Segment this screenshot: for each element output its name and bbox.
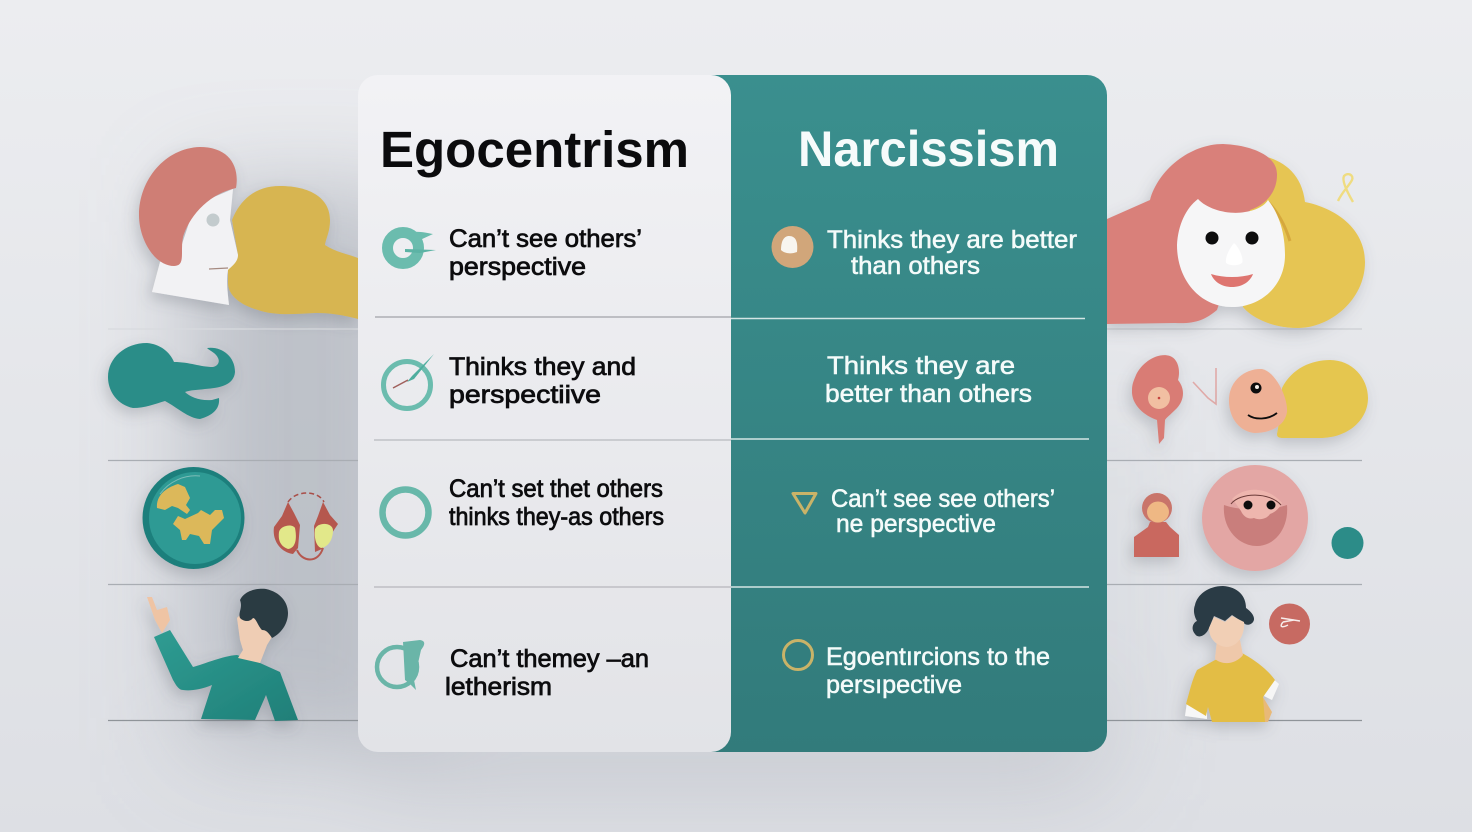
text: narc row 2 bbox=[825, 352, 1032, 408]
icon: pink circle with eyes bbox=[1202, 465, 1308, 571]
icon: teal squiggle bbox=[108, 343, 235, 419]
illustration: left person pointing bbox=[147, 589, 298, 721]
icon: teal dot bbox=[1332, 527, 1364, 559]
hair bbox=[1193, 586, 1254, 636]
icon: red hair bbox=[139, 147, 237, 266]
hair bbox=[240, 589, 288, 638]
text: ego row 1: perspective bbox=[449, 253, 586, 281]
icon: yellow headband bbox=[1268, 202, 1290, 241]
neck and face bbox=[237, 610, 275, 663]
face bbox=[1209, 616, 1244, 647]
icon: narc row 3 bbox=[793, 494, 816, 513]
heading: egocentrism: Egocentrism bbox=[380, 121, 689, 178]
text: narc row 4: Egoentırcions to the bbox=[826, 643, 1050, 671]
text: narc row 1: than others bbox=[851, 252, 980, 280]
panel: egocentrism bbox=[358, 75, 731, 752]
shirt bbox=[1186, 653, 1275, 722]
illustration: right woman face bbox=[1107, 144, 1365, 328]
icon: narc row 4 bbox=[784, 640, 812, 670]
icon: mouth bbox=[209, 268, 228, 269]
text: ego row 2 bbox=[449, 353, 636, 409]
icon: nose bbox=[1226, 243, 1243, 265]
card shadow bbox=[190, 190, 1125, 780]
text: narc row 2: better than others bbox=[825, 380, 1032, 408]
text: ego row 2: perspectiive bbox=[449, 381, 601, 409]
icon: pink check mark bbox=[1193, 368, 1216, 404]
text: narc row 4 bbox=[826, 643, 1050, 699]
icon: ego row 4 bbox=[377, 640, 424, 690]
text: narc row 3: Can’t see see others’ bbox=[831, 485, 1055, 513]
illustration: left head in profile with speech shape bbox=[139, 147, 358, 319]
text: ego row 3 bbox=[449, 475, 664, 531]
heading: narcissism: Narcissism bbox=[798, 121, 1059, 177]
icon: eyes bbox=[1206, 232, 1218, 244]
text: ego row 1 bbox=[449, 225, 642, 281]
icon: yellow ribbon bbox=[1338, 174, 1353, 202]
icon: red glasses figure bbox=[274, 493, 338, 560]
panel: narcissism bbox=[690, 75, 1107, 752]
hand bbox=[147, 597, 170, 633]
text: ego row 3: thinks they-as others bbox=[449, 503, 664, 531]
icon: ego row 1 bbox=[388, 232, 436, 264]
neck bbox=[1215, 640, 1243, 663]
cuff and hand bbox=[1185, 702, 1207, 719]
text: ego row 2: Thinks they and bbox=[449, 353, 636, 381]
icon: white face bbox=[1177, 199, 1285, 307]
text: ego row 4 bbox=[445, 645, 649, 701]
illustration: right peach face and yellow bubble bbox=[1229, 360, 1368, 438]
icon: red badge bbox=[1269, 604, 1310, 644]
icon: red hair bbox=[1107, 144, 1277, 324]
continent: lower bbox=[173, 510, 224, 544]
icon: narc row 1 bbox=[772, 226, 814, 268]
text: ego row 1: Can’t see others’ bbox=[449, 225, 642, 253]
text: narc row 2: Thinks they are bbox=[827, 352, 1015, 380]
icon: mouth bbox=[1211, 274, 1253, 287]
text: narc row 1: Thinks they are better bbox=[827, 226, 1077, 254]
icon: ego row 2 bbox=[384, 354, 434, 408]
icon: globe button bbox=[142, 467, 244, 569]
illustration: right person in yellow shirt bbox=[1185, 586, 1279, 722]
icon: yellow thought shape bbox=[228, 186, 358, 319]
icon: white face bbox=[152, 189, 238, 305]
text: narc row 3: ne perspective bbox=[836, 510, 996, 538]
icon: eye bbox=[206, 214, 220, 226]
text: ego row 3: Can’t set thet others bbox=[449, 475, 663, 503]
text: narc row 3 bbox=[831, 485, 1055, 538]
icon: red pin with peach centre bbox=[1132, 355, 1183, 444]
text: narc row 4: persıpective bbox=[826, 671, 962, 699]
icon: ego row 3 bbox=[382, 490, 428, 536]
text: ego row 4: Can’t themey –an bbox=[450, 645, 649, 673]
text: ego row 4: letherism bbox=[445, 673, 552, 701]
side row lines bbox=[108, 329, 1362, 720]
text: narc row 1 bbox=[827, 226, 1077, 280]
icon: small red bust bbox=[1134, 493, 1179, 557]
body bbox=[154, 630, 298, 721]
icon: yellow hair bbox=[1240, 157, 1365, 328]
comparison card bbox=[358, 75, 1107, 752]
continent: upper bbox=[157, 484, 190, 514]
